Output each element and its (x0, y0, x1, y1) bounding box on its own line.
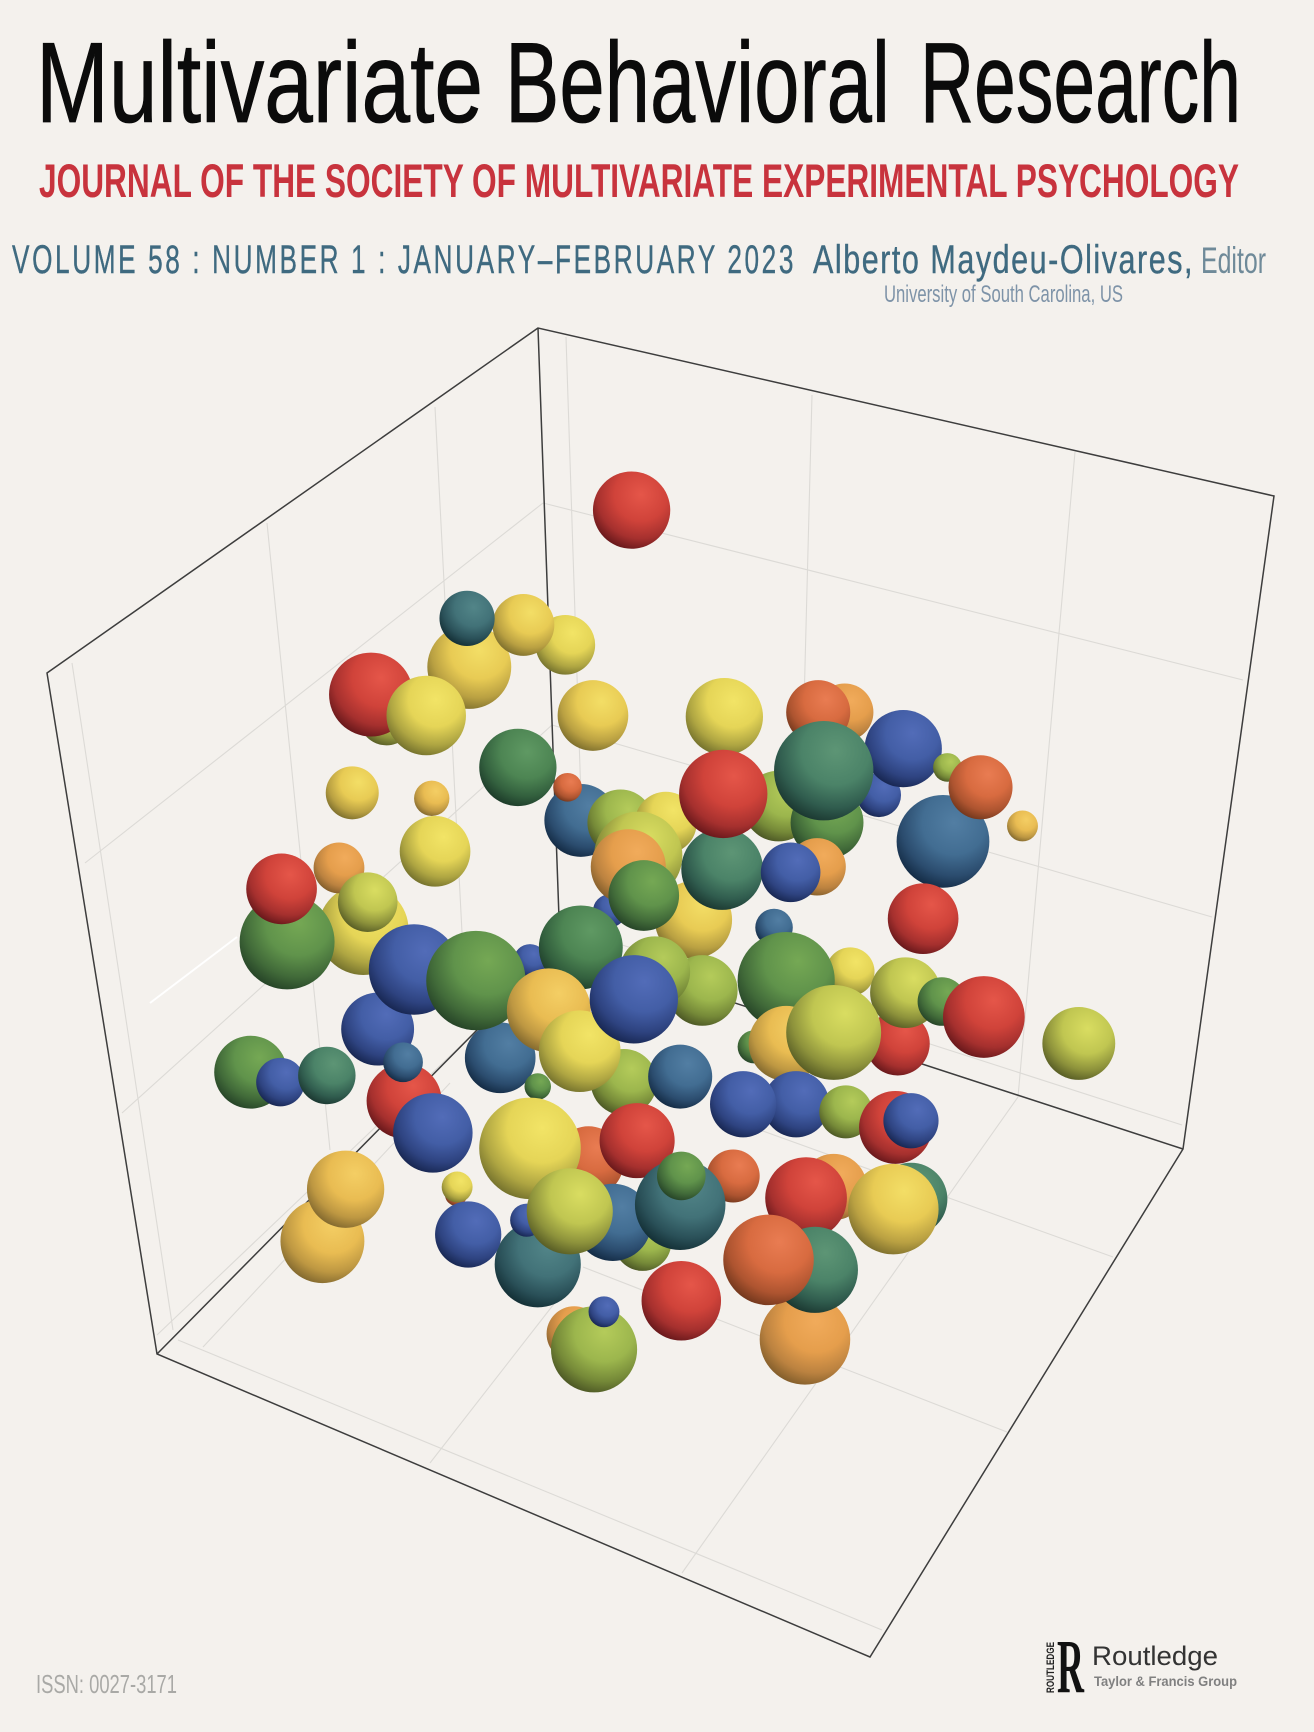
grid lines (72, 337, 1243, 1630)
ISSN: ISSN: 0027-3171 (36, 1669, 177, 1699)
publisher group: Taylor & Francis Group (1094, 1673, 1237, 1689)
title: Behavioral (505, 20, 890, 147)
cube wireframe (47, 328, 1274, 1657)
editor name: Alberto Maydeu-Olivares, (813, 238, 1194, 282)
editor role: Editor (1201, 240, 1266, 281)
publisher logo (1045, 1625, 1237, 1709)
title (36, 20, 1241, 147)
issue line: VOLUME 58 : NUMBER 1 : JANUARY–FEBRUARY 2023 (12, 238, 796, 282)
publisher name: Routledge (1092, 1641, 1218, 1671)
spheres (214, 471, 1115, 1392)
3D scatter plot (47, 328, 1274, 1657)
white highlight line (150, 937, 237, 1003)
editor affiliation: University of South Carolina, US (884, 281, 1123, 308)
icon: vertical wordmark: ROUTLEDGE (1045, 1642, 1057, 1693)
icon: R mark: R (1057, 1625, 1085, 1709)
title: Multivariate (36, 20, 483, 147)
